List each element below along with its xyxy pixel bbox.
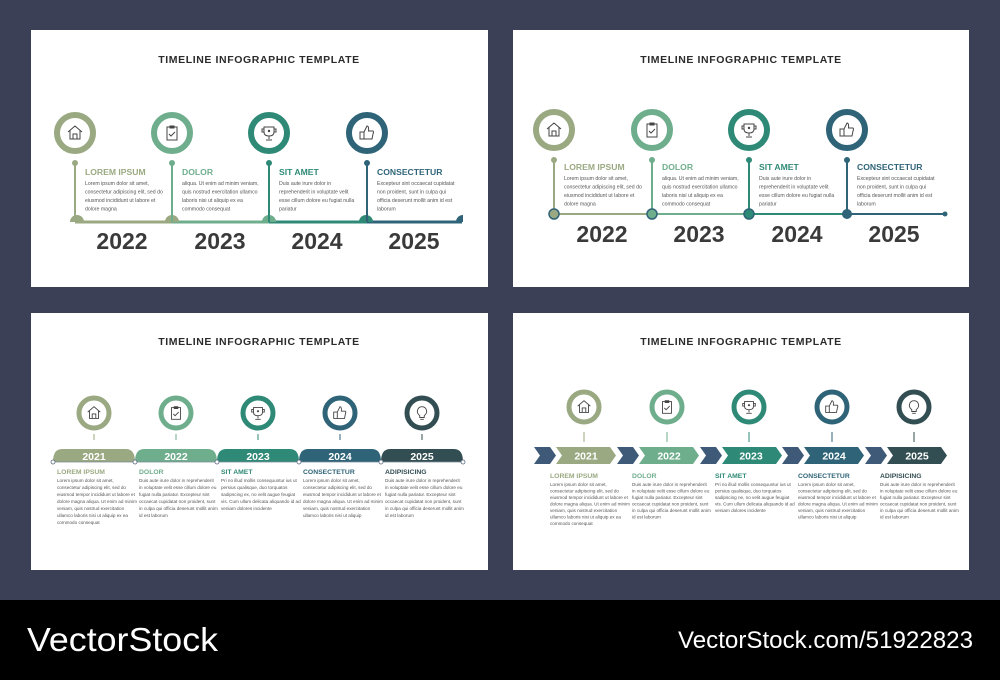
step 2: in culpa qui officia deserunt mollit anim — [632, 508, 711, 513]
step 4: Excepteur sint occaecat cupidatat — [857, 176, 935, 182]
step 2 — [154, 115, 259, 254]
step 1: LOREM IPSUM — [564, 162, 625, 172]
step 2: laboris nisi ut aliquip ex ea — [662, 193, 723, 199]
step 1: 2022 — [96, 228, 148, 254]
step 1: veniam, quis nostrud exercitation — [550, 508, 618, 513]
step 3: veniam dolores incidente — [221, 506, 272, 511]
step 2 — [634, 112, 739, 247]
step 2: in culpa qui officia deserunt mollit anim — [139, 506, 218, 511]
step 1: Lorem ipsum dolor sit amet, — [85, 181, 149, 187]
step 1: dolore magna — [564, 202, 596, 208]
step 2: id est laborum — [632, 514, 661, 520]
step 5: id est laborum — [880, 514, 909, 520]
step 1: consectetur adipiscing elit, sed do — [57, 485, 126, 490]
step 2: quis nostrud exercitation ullamco — [662, 184, 738, 190]
step 4: 2025 — [388, 228, 440, 254]
step 2: fugiat nulla pariatur. Excepteur sint — [632, 495, 703, 500]
step 5: ADIPISICING — [880, 473, 922, 480]
step 1: ullamco laboris nisi ut aliquip ex ea — [550, 514, 621, 520]
step 3: pariatur — [279, 206, 297, 212]
step 4: officia deserunt mollit anim id est — [377, 198, 453, 204]
step 2: in voluptate velit esse cillum dolore eu — [632, 488, 710, 494]
step 1: dolore magna aliqua. Ut enim ad minim — [550, 502, 630, 506]
step 2 — [632, 392, 711, 520]
step 5: ADIPISICING — [385, 469, 427, 476]
step 4: CONSECTETUR — [798, 473, 850, 480]
step 4: eiusmod tempor incididunt ut labore et — [303, 492, 382, 497]
step 4: 2025 — [868, 221, 920, 247]
step 2 — [139, 398, 218, 518]
panel: timeline 4 — [513, 313, 969, 570]
footer bar — [0, 600, 1000, 680]
step 5: in culpa qui officia deserunt mollit anim — [880, 508, 959, 513]
step 5 — [880, 392, 959, 520]
step 2: aliqua. Ut enim ad minim veniam, — [182, 181, 259, 187]
step 1: LOREM IPSUM — [57, 469, 105, 476]
step 1 — [57, 115, 163, 254]
step 2: commodo consequat — [662, 202, 711, 208]
step 2: occaecat cupidatat non proident, sunt — [632, 502, 709, 506]
step 2: commodo consequat — [182, 206, 231, 212]
step 4: eiusmod tempor incididunt ut labore et — [798, 495, 877, 500]
step 4: Lorem ipsum dolor sit amet, — [798, 482, 855, 487]
step 2: id est laborum — [139, 513, 168, 518]
step 1: consectetur adipiscing elit, sed do — [85, 190, 163, 196]
step 4: ullamco laboris nisi ut aliquip — [303, 513, 362, 518]
step 1: consectetur adipiscing elit, sed do — [550, 488, 619, 494]
step 3: Duis aute irure dolor in — [279, 181, 331, 187]
step 4 — [798, 392, 878, 520]
step 4: Excepteur sint occaecat cupidatat — [377, 181, 455, 187]
step 3: esse cillum dolore eu fugiat nulla — [279, 198, 354, 204]
step 4: non proident, sunt in culpa qui — [857, 184, 926, 190]
tab bar: 2024 — [328, 451, 352, 463]
step 3: veniam dolores incidente — [715, 508, 766, 513]
panel: timeline 3 — [31, 313, 488, 570]
step 1: LOREM IPSUM — [85, 167, 146, 177]
step 3: esse cillum dolore eu fugiat nulla — [759, 193, 834, 199]
step 4: laborum — [377, 206, 396, 212]
chevron bar: 2023 — [739, 450, 763, 462]
step 2: 2023 — [194, 228, 246, 254]
step 3: 2024 — [291, 228, 343, 254]
step 3 — [731, 112, 834, 247]
chevron bar: 2025 — [905, 450, 929, 462]
step 2: DOLOR — [182, 167, 214, 177]
step 2: Duis aute irure dolor in reprehenderit — [632, 482, 708, 487]
step 1: dolore magna — [85, 206, 117, 212]
step 4: Lorem ipsum dolor sit amet, — [303, 478, 360, 483]
step 4: veniam, quis nostrud exercitation — [798, 508, 866, 513]
step 5: Duis aute irure dolor in reprehenderit — [385, 478, 461, 483]
step 3: pariatur — [759, 202, 777, 208]
tab bar: 2022 — [164, 451, 188, 463]
tab bar: 2025 — [410, 451, 434, 463]
step 2: laboris nisi ut aliquip ex ea — [182, 198, 243, 204]
step 4: officia deserunt mollit anim id est — [857, 193, 933, 199]
step 2: DOLOR — [139, 469, 164, 476]
step 3: SIT AMET — [279, 167, 320, 177]
step 3: reprehenderit in voluptate velit — [279, 190, 349, 196]
step 2: occaecat cupidatat non proident, sunt — [139, 499, 216, 504]
step 4: non proident, sunt in culpa qui — [377, 190, 446, 196]
step 3: 2024 — [771, 221, 823, 247]
step 4: CONSECTETUR — [377, 167, 443, 177]
baseline line 2 — [554, 212, 948, 216]
footer logo text: VectorStock — [27, 621, 219, 658]
chevron bar: 2024 — [822, 450, 846, 462]
step 5: in voluptate velit esse cillum dolore eu — [385, 485, 463, 490]
step 3: Pri no illud mollis consequuntur ius ut — [221, 478, 298, 483]
step 3: persius qualisque, duo torquatos — [715, 488, 782, 494]
chevron bar: 2021 — [574, 450, 598, 462]
step 5: fugiat nulla pariatur. Excepteur sint — [385, 492, 456, 497]
step 3: sadipscing ex, no velit augue feugiat — [221, 492, 296, 497]
step 1: Lorem ipsum dolor sit amet, — [550, 482, 607, 487]
step 5: occaecat cupidatat non proident, sunt — [880, 502, 957, 506]
step 4: CONSECTETUR — [303, 469, 355, 476]
step 3 — [715, 392, 795, 513]
tab bar: 2023 — [246, 451, 270, 463]
panel: timeline 1 — [31, 30, 488, 287]
step 2: in voluptate velit esse cillum dolore eu — [139, 485, 217, 490]
step 4: dolore magna aliqua. Ut enim ad minim — [303, 499, 383, 504]
heading panel 3: TIMELINE INFOGRAPHIC TEMPLATE — [158, 336, 360, 348]
step 5: occaecat cupidatat non proident, sunt — [385, 499, 462, 504]
step 5: in culpa qui officia deserunt mollit anim — [385, 506, 464, 511]
heading panel 4: TIMELINE INFOGRAPHIC TEMPLATE — [640, 336, 842, 348]
step 2: aliqua. Ut enim ad minim veniam, — [662, 176, 739, 182]
step 3: persius qualisque, duo torquatos — [221, 485, 288, 490]
step 1: eiusmod incididunt ut labore et — [85, 198, 156, 204]
step 1: LOREM IPSUM — [550, 473, 598, 480]
step 1: commodo consequat — [57, 520, 100, 525]
panel: timeline 2 — [513, 30, 969, 287]
step 1: veniam, quis nostrud exercitation — [57, 506, 125, 511]
tab bar: 2021 — [82, 451, 106, 463]
step 3: vis. Cum ullum delicata aliquando id ad — [221, 499, 301, 504]
step 4: veniam, quis nostrud exercitation — [303, 506, 371, 511]
step 4 — [829, 112, 935, 247]
step 5 — [385, 398, 464, 518]
step 4: ullamco laboris nisi ut aliquip — [798, 514, 857, 520]
step 5: Duis aute irure dolor in reprehenderit — [880, 482, 956, 487]
step 4 — [303, 398, 383, 518]
step 1: eiusmod incididunt ut labore et — [564, 193, 635, 199]
step 4: laborum — [857, 202, 876, 208]
step 3: Duis aute irure dolor in — [759, 176, 811, 182]
step 3: sadipscing ne, no velit augue feugiat — [715, 495, 790, 500]
heading panel 2: TIMELINE INFOGRAPHIC TEMPLATE — [640, 54, 842, 66]
step 4: consectetur adipiscing elit, sed do — [798, 488, 867, 494]
step 3 — [221, 398, 301, 511]
step 3: Pri no illud mollis consequuntur ius ut — [715, 482, 792, 487]
step 1: Lorem ipsum dolor sit amet, — [564, 176, 628, 182]
step 2: DOLOR — [662, 162, 694, 172]
step 3: SIT AMET — [221, 469, 253, 476]
step 1 — [550, 392, 630, 526]
chevron bar: 2022 — [657, 450, 681, 462]
step 1: 2022 — [576, 221, 628, 247]
step 2: fugiat nulla pariatur. Excepteur sint — [139, 492, 210, 497]
step 5: fugiat nulla pariatur. Excepteur sint — [880, 495, 951, 500]
footer url text: VectorStock.com/51922823 — [678, 627, 973, 654]
step 1 — [536, 112, 642, 247]
step 1: ullamco laboris nisi ut aliquip ex ea — [57, 513, 128, 518]
step 3: SIT AMET — [759, 162, 800, 172]
step 1: consectetur adipiscing elit, sed do — [564, 184, 642, 190]
step 1: Lorem ipsum dolor sit amet, — [57, 478, 114, 483]
step 3: vis. Cum ullum delicata aliquando id ad — [715, 502, 795, 506]
step 4 — [349, 115, 455, 254]
step 1 — [57, 398, 137, 525]
step 1: eiusmod tempor incididunt ut labore et — [550, 495, 629, 500]
heading panel 1: TIMELINE INFOGRAPHIC TEMPLATE — [158, 54, 360, 66]
step 4: consectetur adipiscing elit, sed do — [303, 485, 372, 490]
step 1: dolore magna aliqua. Ut enim ad minim — [57, 499, 137, 504]
step 2: Duis aute irure dolor in reprehenderit — [139, 478, 215, 483]
step 2: DOLOR — [632, 473, 657, 480]
step 5: in voluptate velit esse cillum dolore eu — [880, 488, 958, 494]
tab bar — [51, 449, 465, 464]
step 5: id est laborum — [385, 513, 414, 518]
step 1: eiusmod tempor incididunt ut labore et — [57, 492, 136, 497]
step 2: quis nostrud exercitation ullamco — [182, 190, 258, 196]
step 4: CONSECTETUR — [857, 162, 923, 172]
step 3 — [251, 115, 354, 254]
step 2: 2023 — [673, 221, 725, 247]
step 1: commodo consequat — [550, 521, 593, 526]
step 3: reprehenderit in voluptate velit — [759, 184, 829, 190]
baseline line — [70, 215, 463, 222]
step 4: dolore magna aliqua. Ut enim ad minim — [798, 502, 878, 506]
step 3: SIT AMET — [715, 473, 747, 480]
chevron bar — [534, 447, 947, 464]
